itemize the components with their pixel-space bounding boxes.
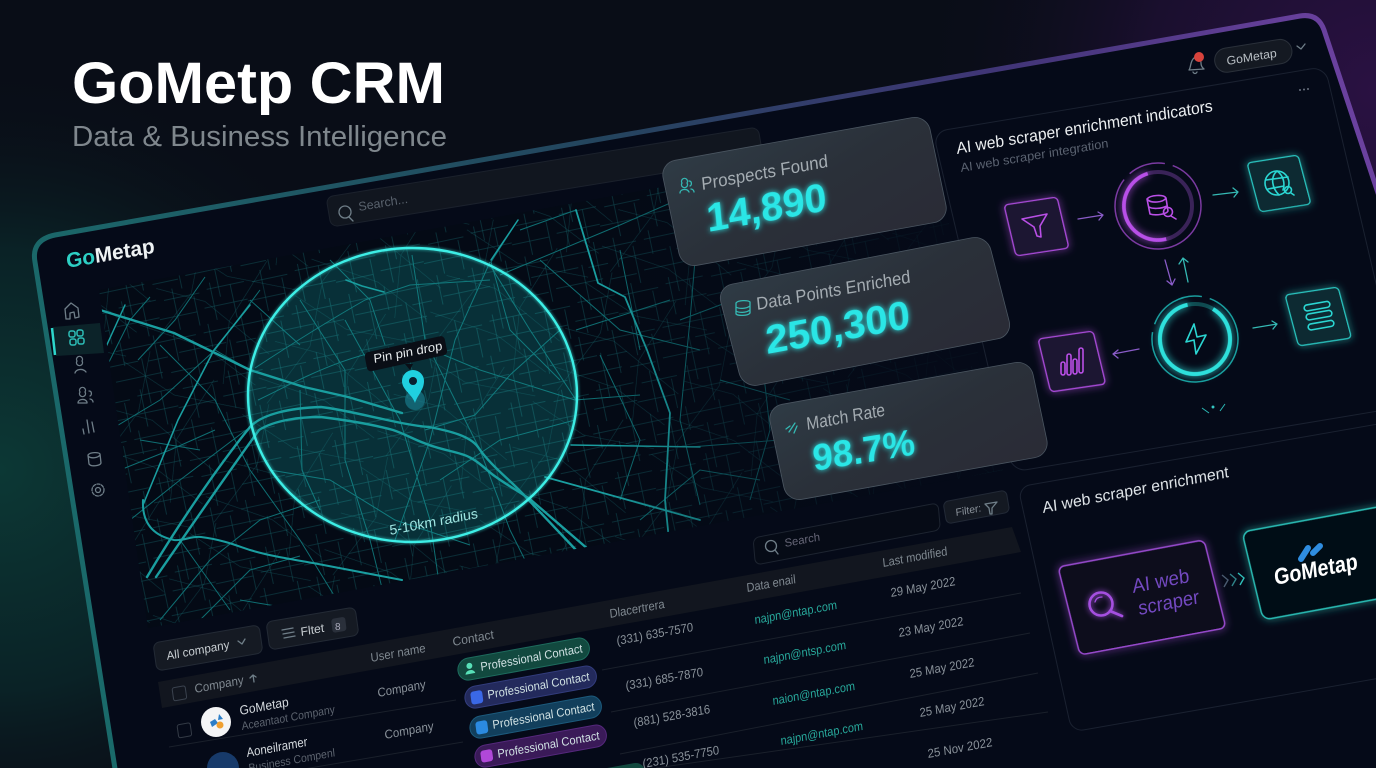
stat card: match rate: Match Rate bbox=[805, 400, 886, 434]
logo: GoMetap bbox=[65, 235, 156, 273]
scraper box bbox=[1058, 540, 1226, 655]
row 3: naion@ntap.com bbox=[772, 679, 856, 708]
scraper box: AI web bbox=[1131, 565, 1190, 598]
row 1: Professional Contact bbox=[480, 641, 584, 674]
arrow bbox=[1078, 212, 1103, 220]
arrow up bbox=[1179, 258, 1188, 282]
user pill bbox=[1213, 38, 1294, 74]
table search bbox=[753, 503, 940, 565]
search radius circle bbox=[248, 248, 577, 542]
icon: home bbox=[65, 303, 79, 319]
chevron bbox=[1297, 44, 1305, 49]
icon: small sparkle bbox=[1202, 404, 1225, 413]
row 1: najpn@ntap.com bbox=[754, 598, 838, 627]
user pill: GoMetap bbox=[1226, 46, 1278, 68]
medium roads bbox=[100, 190, 800, 620]
stat card: prospects found bbox=[660, 115, 949, 268]
row 3: 25 May 2022 bbox=[909, 655, 975, 681]
map panel bbox=[100, 188, 1002, 626]
stat card: match rate bbox=[767, 360, 1050, 502]
icon: GoMetap mark bbox=[1301, 546, 1320, 559]
notification bell bbox=[1189, 52, 1204, 74]
row 2: najpn@ntsp.com bbox=[763, 638, 847, 667]
filter button: Fltet bbox=[300, 621, 326, 639]
row 3: Professional Contact bbox=[492, 699, 596, 732]
table header band bbox=[158, 527, 1021, 708]
icon: match bbox=[786, 423, 797, 433]
table header row: User name bbox=[370, 641, 426, 665]
row 5: 25 Nov 2022 bbox=[927, 735, 993, 761]
row dividers bbox=[169, 593, 1048, 768]
row 1 bbox=[177, 574, 956, 738]
panel: AI web scraper enrichment bbox=[1018, 417, 1376, 732]
stat card: prospects found: 14,890 bbox=[704, 175, 828, 241]
all company filter: All company bbox=[166, 638, 230, 663]
icon: magnifier bbox=[1090, 592, 1122, 616]
row 3: (881) 528-3816 bbox=[633, 702, 711, 730]
icon: bolt ring bbox=[1140, 284, 1250, 394]
icon: dashboard grid bbox=[69, 330, 84, 345]
menu dots bbox=[1299, 88, 1309, 91]
notification badge bbox=[1194, 52, 1204, 62]
scraper box: scraper bbox=[1137, 586, 1201, 620]
arrow bbox=[1113, 349, 1139, 358]
row 4: 25 May 2022 bbox=[919, 694, 985, 720]
table header row: Company bbox=[194, 673, 245, 696]
row 2: Company bbox=[384, 719, 435, 742]
icon: globe box bbox=[1247, 155, 1311, 212]
table filter: Filter: bbox=[955, 503, 982, 519]
radius label: 5-10km radius bbox=[389, 505, 479, 538]
stat card: data points enriched: Data Points Enriched bbox=[755, 267, 911, 314]
table header row: Contact bbox=[452, 627, 495, 649]
icon: settings center bbox=[96, 488, 100, 492]
stat card: data points enriched bbox=[717, 235, 1013, 388]
GoMetap box: GoMetap bbox=[1273, 548, 1359, 590]
icon: filter box bbox=[1004, 197, 1069, 256]
chevrons bbox=[1222, 573, 1244, 587]
icon: bars bbox=[83, 420, 94, 434]
panel heading: AI web scraper enrichment bbox=[1042, 464, 1230, 517]
row 2: 23 May 2022 bbox=[898, 614, 964, 640]
row 1: (331) 635-7570 bbox=[616, 620, 694, 648]
stat card: prospects found: Prospects Found bbox=[700, 151, 829, 194]
row 3 bbox=[469, 655, 975, 740]
subtitle: Data & Business Intelligence bbox=[72, 121, 447, 153]
panel subheading: AI web scraper integration bbox=[960, 136, 1109, 175]
stat card: data points enriched: 250,300 bbox=[763, 293, 912, 363]
major roads bbox=[100, 210, 700, 580]
panel: AI enrichment indicators bbox=[933, 67, 1376, 472]
icon: server box bbox=[1285, 287, 1352, 346]
row 4: najpn@ntap.com bbox=[780, 719, 864, 748]
table search: Search bbox=[784, 532, 821, 550]
search bar bbox=[326, 127, 763, 227]
table header row bbox=[172, 544, 948, 701]
arrow down bbox=[1165, 260, 1175, 285]
pin label: Pin pin drop bbox=[373, 339, 443, 366]
row 2 bbox=[207, 614, 964, 768]
icon: settings bbox=[92, 484, 104, 496]
icon: database ring bbox=[1103, 151, 1213, 261]
row 2: (331) 685-7870 bbox=[625, 665, 704, 693]
filter pills bbox=[153, 607, 359, 671]
table header row: Data enail bbox=[746, 572, 796, 595]
arrow bbox=[1253, 321, 1277, 329]
icon: users bbox=[680, 178, 694, 193]
arrow bbox=[1213, 188, 1238, 197]
filter button: 8 bbox=[335, 622, 341, 633]
icon: database bbox=[736, 301, 750, 315]
icon: users bbox=[78, 387, 93, 403]
row 1: 29 May 2022 bbox=[890, 574, 956, 600]
sidebar navigation bbox=[52, 303, 104, 496]
filter button bbox=[266, 607, 359, 650]
icon: database bbox=[88, 453, 101, 466]
active nav highlight bbox=[53, 323, 104, 356]
row 1: Aceantaot Company bbox=[241, 704, 336, 733]
row 4: Professional Contact bbox=[497, 728, 601, 761]
panel heading: AI web scraper enrichment indicators bbox=[956, 97, 1214, 158]
pin label bbox=[364, 335, 448, 372]
all company filter bbox=[153, 625, 263, 671]
row 5 bbox=[585, 735, 993, 768]
title: GoMetp CRM bbox=[72, 51, 445, 116]
row 4 bbox=[474, 694, 985, 768]
row 2: Aoneilramer bbox=[246, 734, 309, 760]
stat card: match rate: 98.7% bbox=[811, 421, 917, 479]
table header row: Dlacertrera bbox=[609, 597, 665, 621]
map pin bbox=[402, 370, 425, 410]
row 2: Professional Contact bbox=[487, 669, 591, 702]
row 1: Company bbox=[377, 677, 427, 700]
table filter bbox=[943, 490, 1010, 524]
GoMetap box bbox=[1242, 503, 1376, 620]
row 1: GoMetap bbox=[239, 694, 289, 718]
active nav marker bbox=[52, 328, 55, 355]
icon: user bbox=[75, 356, 86, 373]
search bar: Search... bbox=[358, 192, 409, 214]
table header row: Last modified bbox=[882, 544, 948, 570]
data table bbox=[158, 527, 1048, 768]
icon: chart box bbox=[1038, 331, 1106, 392]
